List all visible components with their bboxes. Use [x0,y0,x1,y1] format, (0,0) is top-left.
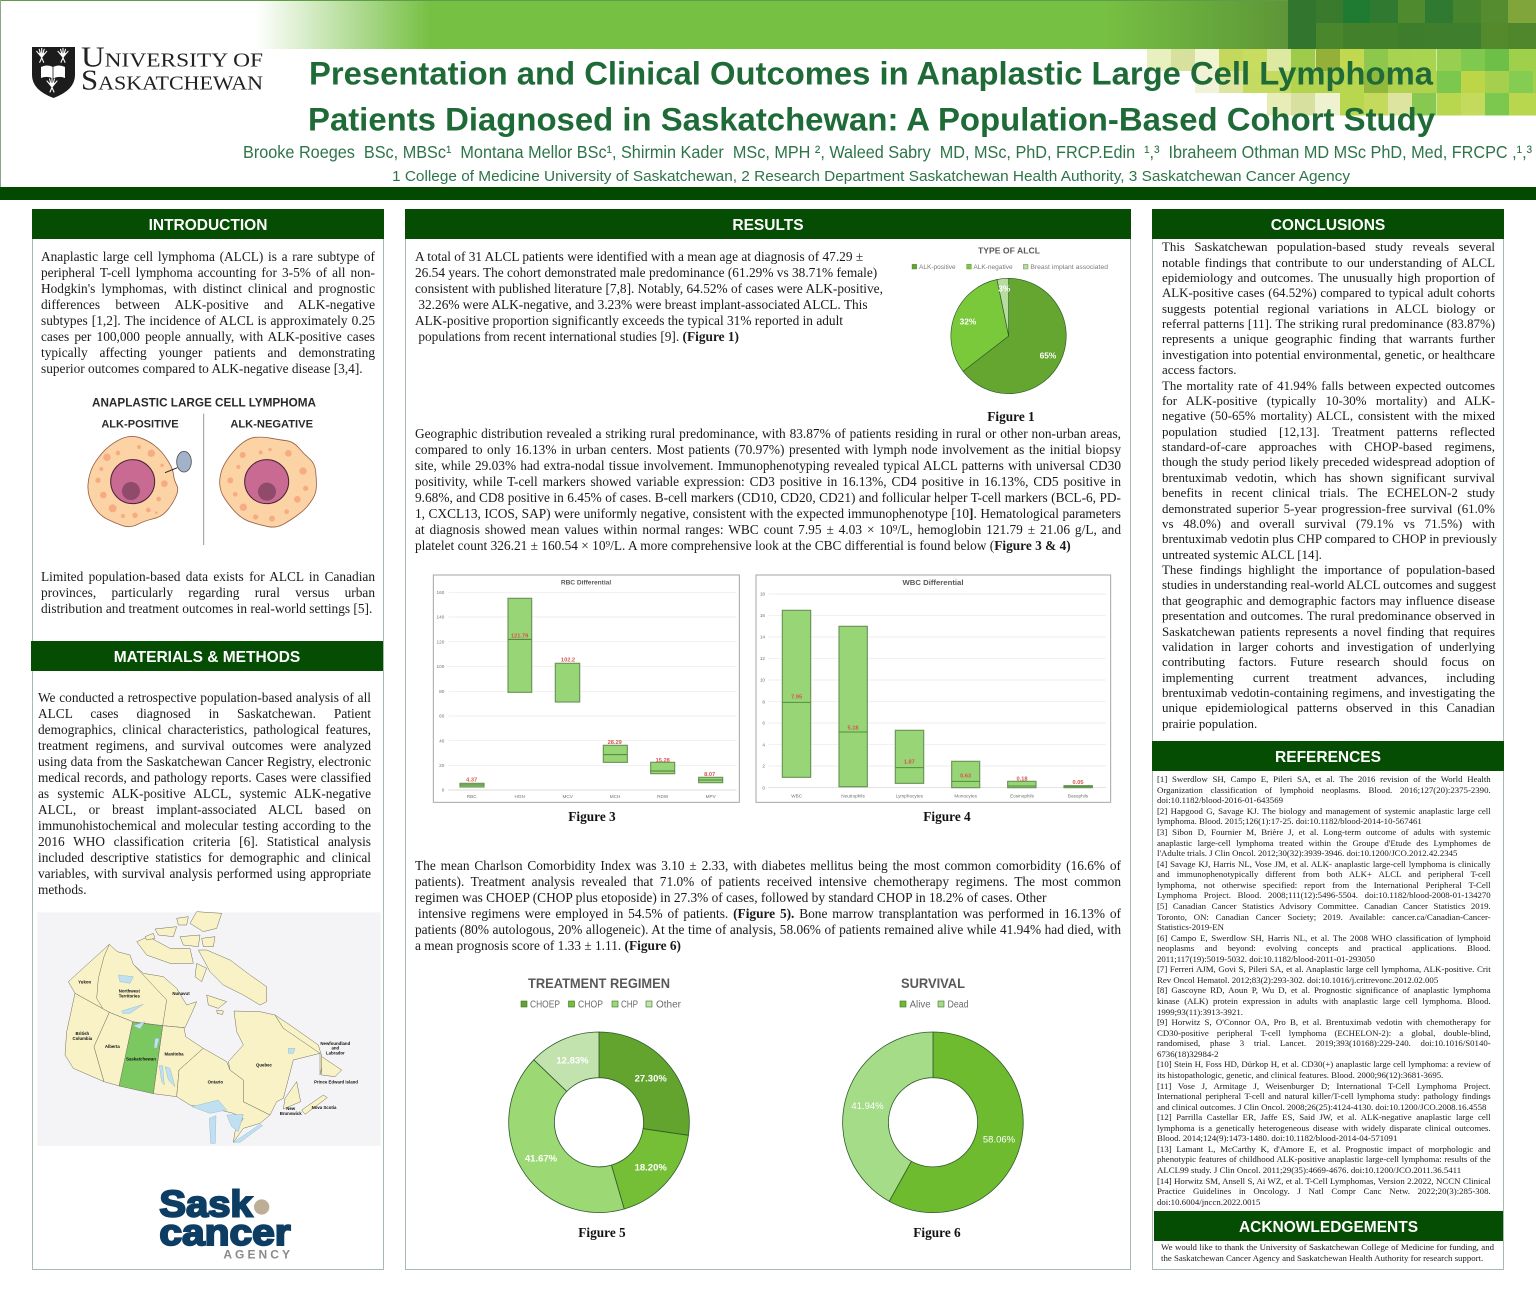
legend [912,264,1108,271]
text: methods: using data from the Saskatchewan Cancer Registry, electronic [38,754,371,769]
text: references: [12] Parrilla Castellar ER, Jaffe ES, Said JW, et al. ALK-negative anaplastic large cell [1157,1112,1491,1122]
donut chart: treatment regimen: 18.20% [635,1162,667,1174]
map of Canada with Saskatchewan highlighted: Ontario [208,1079,223,1084]
text: references: 6736(18)32984-2 [1157,1049,1219,1059]
text: limited data paragraph: provinces, particularly regarding rural versus urban [41,585,375,600]
box plot: RBC differential: 80 [439,689,445,694]
panel: right column [1152,209,1504,1270]
text: results paragraph 2: 9.68%, and CD8 positive in 6.45% of cases. B-cell markers (CD10, CD20, CD21) and follicular helper T-cell markers (BCL-6, PD- [415,490,1121,505]
box plot: RBC differential: 60 [439,714,445,719]
text: results paragraph 2 [415,426,1121,553]
text: conclusions: ALK-positive cases (64.52%) compared to typical adult cohorts [1162,286,1495,300]
figure: ALK-positive vs ALK-negative cells: ALK-NEGATIVE [230,418,313,430]
pie chart: type of ALCL: 65% [1040,351,1057,361]
university logo: UNIVERSITY OF [81,42,263,74]
box plot: WBC differential: 8 [762,699,765,704]
text: methods: ALCL cases diagnosed in Saskatchewan. Patient [38,706,371,721]
figure: ALK-positive vs ALK-negative cells: ANAPLASTIC LARGE CELL LYMPHOMA [92,396,316,410]
box plot: RBC differential: 102.2 [561,658,575,664]
text: introduction: peripheral T-cell lymphoma accounting for 3-5% of all non- [41,265,375,280]
box plot: RBC differential: 4.37 [466,778,477,784]
text: introduction: Hodgkin's lymphomas, with distinct clinical and prognostic [41,281,375,296]
map of Canada with Saskatchewan highlighted: Nova Scotia [312,1105,337,1110]
heading: conclusions [1152,209,1504,239]
logo: Sask Cancer Agency: Sask [159,1183,253,1225]
text: methods: demographics, clinical characteristics, pathological features, [38,722,371,737]
box plot: WBC differential: 0 [762,785,765,790]
text: methods [38,690,371,897]
university logo: SASKATCHEWAN [81,66,263,96]
text: references: 2011;117(19):5019-5032. doi:10.1182/blood-2011-01-293050 [1157,954,1375,964]
text: conclusions: that geographic and demographic factors may influence disease [1162,594,1495,608]
map of Canada with Saskatchewan highlighted: Newfoundland [320,1041,351,1046]
map of Canada with Saskatchewan highlighted: Labrador [326,1051,345,1056]
text: references: and immunophenotypically different from both ALK+ ALCL and peripheral T-cell [1157,869,1491,879]
heading: acknowledgements [1154,1211,1503,1241]
header banner [0,0,1536,200]
text: conclusions: brentuximab vedotin-containing regimens, and investigating the [1162,686,1495,700]
box plot: RBC differential: 121.79 [511,634,528,640]
legend: ALK-negative [973,264,1013,271]
text: methods: methods. [38,882,87,897]
box plot: WBC differential: WBC [791,793,803,798]
box plot: WBC differential [756,574,1112,803]
text: references: 1999;93(11):3913-3921. [1157,1007,1243,1017]
donut chart: treatment regimen [509,975,689,1213]
text: conclusions: population studied [12,13]. Treatment patterns reflected [1162,425,1495,439]
text: references: [8] Gascoyne RD, Aoun P, Wu D, et al. Prognostic significance of anaplastic lymphoma [1157,985,1491,995]
donut chart: treatment regimen: CHP [621,1000,638,1010]
poster title: Patients Diagnosed in Saskatchewan: A Population-Based Cohort Study [308,102,1435,138]
logo: Sask Cancer Agency: AGENCY [223,1247,290,1261]
text: references: CD30-positive peripheral T-cell lymphoma (ECHELON-2): a global, double-blind, [1157,1028,1491,1038]
text: references: Lymphoma Project. Blood. 2008;111(12):5496-5504. doi:10.1182/blood-2008-01-134270 [1157,890,1491,900]
text: results paragraph 2: compared to only 16.13% in urban centers. Most patients (70.97%) presented with lymph node involvement as the initial biopsy [415,442,1121,457]
box plot: WBC differential: 16 [760,613,765,618]
text: references: [5] Canadian Cancer Statistics Advisory Committee. Canadian Cancer Statistics 2019. [1157,901,1491,911]
text: references: randomised, phase 3 trial. Lancet. 2019;393(10168):229-240. doi:10.1016/S0140- [1157,1038,1491,1048]
heading: introduction [32,209,384,239]
box plot: WBC differential: Neutrophils [841,793,865,798]
box plot: RBC differential: RDW [657,794,669,799]
box plot: RBC differential: 20 [439,763,445,768]
map of Canada with Saskatchewan highlighted: and [331,1046,340,1051]
figure: ALK-positive vs ALK-negative cells [88,396,317,545]
text: conclusions: The mortality rate of 41.94% falls between expected outcomes [1162,379,1495,393]
text: introduction: typically affecting younger patients and demonstrating [41,345,375,360]
donut chart: treatment regimen: 12.83% [556,1056,589,1066]
text: references: Rev Oncol Hematol. 2012;83(2):293-302. doi:10.1016/j.critrevonc.2012.02.005 [1157,975,1438,985]
text: introduction: cases per 100,000 people annually, with ALK-positive cases [41,329,375,344]
map of Canada with Saskatchewan highlighted: Yukon [78,979,92,984]
text: conclusions: investigation into potential environmental, genetic, or healthcare [1162,348,1495,362]
text: references: [1] Swerdlow SH, Campo E, Pileri SA, et al. The 2016 revision of the World Health [1157,774,1491,784]
text: results paragraph 2: positivity, while T-cell markers showed variable expression: CD3 positive in 16.13%, CD4 positive in 16.13%, CD5 positive in [415,474,1121,489]
text: references: lymphoma, not otherwise specified: report from the International Peripheral T-Cell [1157,880,1491,890]
caption: figure 6: Figure 6 [913,1225,961,1240]
text: results paragraph 3: patients). Treatment analysis revealed that 71.0% of patients received intensive chemotherapy regimens. The most common [415,874,1121,889]
text: results paragraph 3 [415,858,1121,953]
heading: materials and methods [31,641,383,671]
map of Canada with Saskatchewan highlighted: Prince Edward Island [314,1079,358,1084]
box plot: RBC differential: 28.29 [608,740,622,746]
text: acknowledgements: the Saskatchewan Cancer Agency and Saskatchewan Health Authority for research support. [1161,1253,1483,1263]
box plot: RBC differential: 40 [439,738,445,743]
text: references: [6] Campo E, Swerdlow SH, Harris NL, et al. The 2008 WHO classification of lymphoid [1157,933,1491,943]
donut chart: survival [843,975,1023,1213]
box plot: WBC differential: 18 [760,592,765,597]
box plot: WBC differential: 1.87 [904,760,915,766]
donut chart: treatment regimen: TREATMENT REGIMEN [528,975,670,991]
text: introduction: differences between ALK-positive and ALK-negative [41,297,375,312]
heading: materials and methods: MATERIALS & METHODS [114,649,300,666]
legend: Breast implant associated [1030,264,1108,271]
box plot: WBC differential: 2 [762,764,765,769]
logo: Sask Cancer Agency [159,1183,291,1261]
box plot: RBC differential: RBC [467,794,477,799]
box plot: RBC differential: RBC Differential [561,579,611,586]
caption: figure 1: Figure 1 [987,409,1035,424]
text: results paragraph 2: at diagnosis showed mean values within normal ranges: WBC count 7.95 ± 4.03 × 10⁹/L, hemoglobin 121.79 ± 21.06 g/L, and [415,522,1121,537]
text: limited data paragraph: Limited population-based data exists for ALCL in Canadian [41,569,375,584]
box plot: RBC differential: 140 [437,615,445,620]
text: conclusions: benefits in recent clinical trials. The ECHELON-2 study [1162,486,1495,500]
text: limited data paragraph: distribution and treatment outcomes in real-world settings [5]. [41,601,372,616]
map of Canada with Saskatchewan highlighted: Territories [119,993,140,998]
box plot: RBC differential: MPV [706,794,717,799]
heading: results: RESULTS [732,217,804,234]
text: conclusions: implementing current treatment advances, including [1162,671,1495,685]
map of Canada with Saskatchewan highlighted: Saskatchewan [126,1057,156,1062]
text: references: anaplastic large-cell lymphoma treated within the Groupe d'Etude des Lymphomes de [1157,838,1491,848]
logo: Sask Cancer Agency: cancer [159,1211,291,1253]
text: conclusions: These findings highlight the importance of population-based [1162,563,1495,577]
text: references: [7] Ferreri AJM, Govi S, Pileri SA, et al. Anaplastic large cell lymphoma, ALK-positive. Crit [1157,964,1491,974]
donut chart: treatment regimen: CHOP [578,1000,603,1010]
box plot: WBC differential: 4 [762,742,765,747]
text: references: [3] Sibon D, Fournier M, Brière J, et al. Long-term outcome of adults with systemic [1157,827,1491,837]
text: conclusions: for ALK-positive (typically 10-30% mortality) and ALK- [1162,394,1495,408]
text: references: [9] Horwitz S, O'Connor OA, Pro B, et al. Brentuximab vedotin with chemotherapy for [1157,1017,1491,1027]
text: references: [2] Hapgood G, Savage KJ. The biology and management of systemic anaplastic large cell [1157,806,1491,816]
text: conclusions: presentation and outcomes. The rural predominance observed in [1162,609,1495,623]
text: methods: variables, with survival analysis performed using appropriate [38,866,371,881]
caption: figure 3: Figure 3 [568,809,616,824]
map of Canada with Saskatchewan highlighted: Brunswick [280,1111,302,1116]
text: conclusions: prairie population. [1162,717,1257,731]
box plot: WBC differential: 6 [762,721,765,726]
text: references: International peripheral T-cell and natural killer/T-cell lymphoma study: pathology findings [1157,1091,1491,1101]
box plot: RBC differential: 15.28 [656,758,670,764]
heading: references [1152,741,1504,771]
map of Canada with Saskatchewan highlighted: New [286,1106,296,1111]
text: conclusions: referral patterns [11]. The striking rural predominance (83.87%) [1162,317,1495,331]
box plot: WBC differential: 0.18 [1016,776,1028,782]
box plot: WBC differential: 0.63 [960,774,971,780]
box plot: WBC differential: Monocytes [954,793,978,798]
map of Canada with Saskatchewan highlighted: British [75,1031,90,1036]
box plot: RBC differential: 160 [437,590,445,595]
text: references: lymphoma is a genetically heterogeneous disease with widely disparate clinical outcomes. [1157,1123,1491,1133]
text: references: phenotypic features of childhood ALK-positive anaplastic large-cell lymphoma: results of the [1157,1154,1491,1164]
pie chart: type of ALCL [912,245,1108,394]
text: references: neoplasms and beyond: evolving concepts and practical applications. Blood. [1157,943,1491,953]
box plot: RBC differential: 0 [442,788,445,793]
poster title: Presentation and Clinical Outcomes in Anaplastic Large Cell Lymphoma [309,56,1433,92]
text: conclusions: untreated systemic ALCL [14]. [1162,548,1322,562]
text: results paragraph 3: patients (80% autologous, 20% allogeneic). At the time of analysis, 58.06% of patients remained alive while 41.94% had died, with [415,922,1121,937]
text: conclusions: studies in understanding real-world ALCL outcomes and suggest [1162,578,1496,592]
text: methods: included descriptive statistics for demographic and clinical [38,850,371,865]
text: references [1157,774,1491,1207]
text: references: [13] Lamant L, McCarthy K, d'Amore E, et al. Prognostic impact of morphologic and [1157,1144,1491,1154]
caption: figure 5: Figure 5 [578,1225,626,1240]
text: references: doi:10.6004/jnccn.2022.0015 [1157,1197,1260,1207]
box plot: WBC differential: Lymphocytes [896,793,924,798]
text: conclusions: suggests potential regional variations in ALCL biology or [1162,302,1495,316]
text: references: [10] Stein H, Foss HD, Dürkop H, et al. CD30(+) anaplastic large cell lymphoma: a review of [1157,1059,1491,1069]
text: results paragraph 3: The mean Charlson Comorbidity Index was 3.10 ± 2.33, with diabetes mellitus being the most common comorbidity (16.6% of [415,858,1121,873]
legend: ALK-positive [919,264,956,271]
icon: ALK-negative cell [220,437,316,527]
box plot: RBC differential: 8.07 [704,772,715,778]
text: results paragraph 2: 1, CXCL13, ICOS, SAP) were uniformly negative, consistent with the expected immunophenotype [10]. Hematological parameters [415,506,1121,521]
figures: Canada map and Sask Cancer logo [38,911,380,1261]
text: introduction [41,249,375,376]
box plot: RBC differential: MCV [562,794,574,799]
text: references: Statistics-2019-EN [1157,922,1224,932]
donut chart: treatment regimen: 41.67% [525,1154,558,1164]
text: references: doi:10.1182/blood-2016-01-643569 [1157,795,1283,805]
text: results paragraph 2: Geographic distribution revealed a striking rural predominance, with 83.87% of patients residing in rural or other non-urban areas, [415,426,1121,441]
box plot: WBC differential: WBC Differential [902,578,964,587]
text: conclusions: demonstrated superior 5-year progression-free survival (61.0% [1162,502,1495,516]
text: methods: 2016 WHO classification criteria [6]. Statistical analysis [38,834,371,849]
pie chart: type of ALCL: 32% [960,317,977,327]
donut charts [508,975,1024,1213]
box plot: RBC differential: MCH [610,794,620,799]
text: conclusions [1162,240,1497,731]
text: methods: We conducted a retrospective population-based analysis of all [38,690,371,705]
donut chart: treatment regimen: CHOEP [530,1000,560,1010]
icon: ALK-positive cell [88,436,191,527]
map of Canada with Saskatchewan highlighted: Quebec [256,1063,273,1068]
text: references: kinase (ALK) protein expression in adults with anaplastic large cell lymphoma. Blood. [1157,996,1491,1006]
text: results paragraph 3: a mean prognosis score of 1.33 ± 1.11. (Figure 6) [415,938,681,953]
text: references: and clinical outcomes. J Clin Oncol. 2008;26(25):4124-4130. doi:10.1200/JCO.2008.16.4558 [1157,1102,1486,1112]
text: introduction: subtypes [1,2]. The incidence of ALCL is approximately 0.25 [41,313,375,328]
donut chart: survival: 58.06% [983,1134,1016,1146]
university logo [32,42,263,98]
heading: acknowledgements: ACKNOWLEDGEMENTS [1239,1219,1418,1236]
text: conclusions: access factors. [1162,363,1236,377]
text: references: Practice Guidelines in Oncology. J Natl Compr Canc Netw. 2022;20(3):285-308. [1157,1186,1491,1196]
box plot: RBC differential: 120 [437,639,445,644]
text: references: [14] Horwitz SM, Ansell S, Ai WZ, et al. T-Cell Lymphomas, Version 2.2022, NCCN Clinical [1157,1176,1491,1186]
text: conclusions: unique epidemiological patterns observed in this Canadian [1162,701,1495,715]
box plot: WBC differential: Basophils [1068,793,1089,798]
text: conclusions: represents a unique geographic finding that warrants further [1162,332,1495,346]
pie chart: type of ALCL: TYPE OF ALCL [978,245,1040,255]
donut chart: survival: Alive [910,1000,931,1010]
text: references: [11] Vose J, Armitage J, Weisenburger D; International T-Cell Lymphoma Project. [1157,1080,1491,1090]
box plot: RBC differential [432,574,740,803]
text: references: l'Adulte trials. J Clin Oncol. 2012;30(32):3939-3946. doi:10.1200/JCO.2012.42.2345 [1157,848,1457,858]
text: conclusions: vs 48.0%) and overall survival (79.1% vs 71.5%) with [1162,517,1495,531]
figure: ALK-positive vs ALK-negative cells: ALK-POSITIVE [101,418,179,430]
donut chart: treatment regimen: Other [656,1000,682,1010]
donut chart: treatment regimen: 27.30% [635,1074,667,1084]
panel: results [405,209,1131,1270]
caption: figure 4: Figure 4 [923,809,971,824]
affiliations: 1 College of Medicine University of Saskatchewan, 2 Research Department Saskatchewan Health Authority, 3 Saskatchewan Cancer Agency [392,168,1351,185]
text: conclusions: This Saskatchewan population-based study reveals several [1162,240,1495,254]
text: methods: as systemic ALK-positive ALCL, systemic ALK-negative [38,786,371,801]
text: references: Organization classification of lymphoid neoplasms. Blood. 2016;127(20):2375-2390. [1157,785,1491,795]
text: acknowledgements [1161,1242,1494,1263]
text: conclusions: Saskatchewan patients represents a novel finding that requires [1162,625,1495,639]
text: results paragraph 3: intensive regimens were employed in 54.5% of patients. (Figure 5). Bone marrow transplantation was performed in 16.13% of [418,906,1121,921]
text: conclusions: contributing factors. Future research should focus on [1162,655,1495,669]
text: results paragraph 1: consistent with published literature [7,8]. Notably, 64.52% of cases were ALK-positive, [415,281,883,296]
text: results paragraph 1: 26.54 years. The cohort demonstrated male predominance (61.29% vs 38.71% female) [415,265,877,280]
text: conclusions: validation in larger cohorts and investigation of underlying [1162,640,1495,654]
text: references: Toronto, ON: Canadian Cancer Society; 2019. Available: cancer.ca/Canadian-Cancer- [1157,912,1491,922]
donut chart: survival: Dead [948,1000,968,1010]
text: methods: treatment regimens, and survival outcomes were analyzed [38,738,371,753]
box plot: RBC differential: HGN [514,794,525,799]
text: results paragraph 1: ALK-positive proportion significantly exceeds the typical 31% reported in adult [415,313,843,328]
text: results paragraph 1: 32.26% were ALK-negative, and 3.23% were breast implant-associated ALCL. This [418,297,868,312]
text: introduction: superior outcomes compared to ALK-negative disease [3,4]. [41,361,363,376]
text: results paragraph 2: platelet count 326.21 ± 160.54 × 10⁹/L. A more comprehensive look at the CBC differential is found below (Figure 3 & 4) [415,538,1071,553]
text: limited data paragraph [41,569,375,616]
text: results paragraph 3: regimen was CHOEP (CHOP plus etoposide) in 27.3% of cases, followed by standard CHOP in 18.2% of cases. Other [415,890,1047,905]
text: results paragraph 2: site, while 29.03% had extra-nodal tissue involvement. Immunophenotyping revealed typical ALCL patterns with universal CD30 [415,458,1121,473]
text: introduction: Anaplastic large cell lymphoma (ALCL) is a rare subtype of [41,249,375,264]
map of Canada with Saskatchewan highlighted: Nunavut [172,991,190,996]
map of Canada with Saskatchewan highlighted [37,912,381,1146]
text: references: [4] Savage KJ, Harris NL, Vose JM, et al. ALK- anaplastic large-cell lymphoma is clinically [1157,859,1491,869]
text: conclusions: though the study period likely preceded widespread adoption of [1162,455,1495,469]
text: results paragraph 1 [415,249,883,344]
text: methods: immunohistochemical and molecular testing according to the [38,818,371,833]
donut chart: survival: SURVIVAL [901,975,965,991]
text: references: ALCL99 study. J Clin Oncol. 2011;29(35):4669-4676. doi:10.1200/JCO.2011.36.5411 [1157,1165,1461,1175]
map of Canada with Saskatchewan highlighted: Alberta [105,1044,120,1049]
text: conclusions: brentuximab vedotin, which has shown significant survival [1162,471,1495,485]
box plot: WBC differential: 12 [760,656,765,661]
pie chart: type of ALCL: 3% [998,283,1011,293]
box plot: WBC differential: 10 [760,678,765,683]
text: methods: ALCL, or breast implant-associated ALCL based on [38,802,371,817]
heading: conclusions: CONCLUSIONS [1271,217,1385,234]
map of Canada with Saskatchewan highlighted: Northwest [119,988,140,993]
panel: left column [32,209,384,1270]
text: references: its histopathologic, genetic, and clinical features. Blood. 2000;96(12):3681-3695. [1157,1070,1443,1080]
box plot: WBC differential: 0.05 [1072,780,1084,786]
text: methods: medical records, and pathology reports. Cases were classified [38,770,371,785]
text: references: lymphoma. Blood. 2015;126(1):17-25. doi:10.1182/blood-2014-10-567461 [1157,816,1422,826]
heading: introduction: INTRODUCTION [149,217,267,234]
text: conclusions: brentuximab vedotin plus CHP compared to CHOP in previously [1162,532,1497,546]
map of Canada with Saskatchewan highlighted: Columbia [72,1036,93,1041]
poster title [308,56,1435,138]
map of Canada with Saskatchewan highlighted: Manitoba [164,1052,184,1057]
box plot: WBC differential: 7.95 [791,694,802,700]
box plot: RBC differential: 100 [437,664,445,669]
text: conclusions: notable findings that contribute to our understanding of ALCL [1162,256,1495,270]
donut chart: survival: 41.94% [851,1101,884,1112]
heading: results [405,209,1131,239]
text: acknowledgements: We would like to thank the University of Saskatchewan College of Medicine for funding, and [1161,1242,1494,1252]
text: results paragraph 1: populations from recent international studies [9]. (Figure 1) [418,329,739,344]
text: results paragraph 1: A total of 31 ALCL patients were identified with a mean age at diagnosis of 47.29 ± [415,249,863,264]
heading: references: REFERENCES [1275,749,1381,766]
box plot: WBC differential: 5.18 [847,725,859,731]
text: conclusions: standard-of-care approaches with CHOP-based regimens, [1162,440,1495,454]
box plot: WBC differential: 14 [760,635,765,640]
text: references: Blood. 2014;124(9):1473-1480. doi:10.1182/blood-2014-04-571091 [1157,1133,1397,1143]
text: conclusions: negative (50-65% mortality) ALCL, consistent with the mixed [1162,409,1495,423]
text: conclusions: epidemiology and outcomes. The unusually high proportion of [1162,271,1495,285]
box plot: WBC differential: Eosinophils [1010,793,1035,798]
